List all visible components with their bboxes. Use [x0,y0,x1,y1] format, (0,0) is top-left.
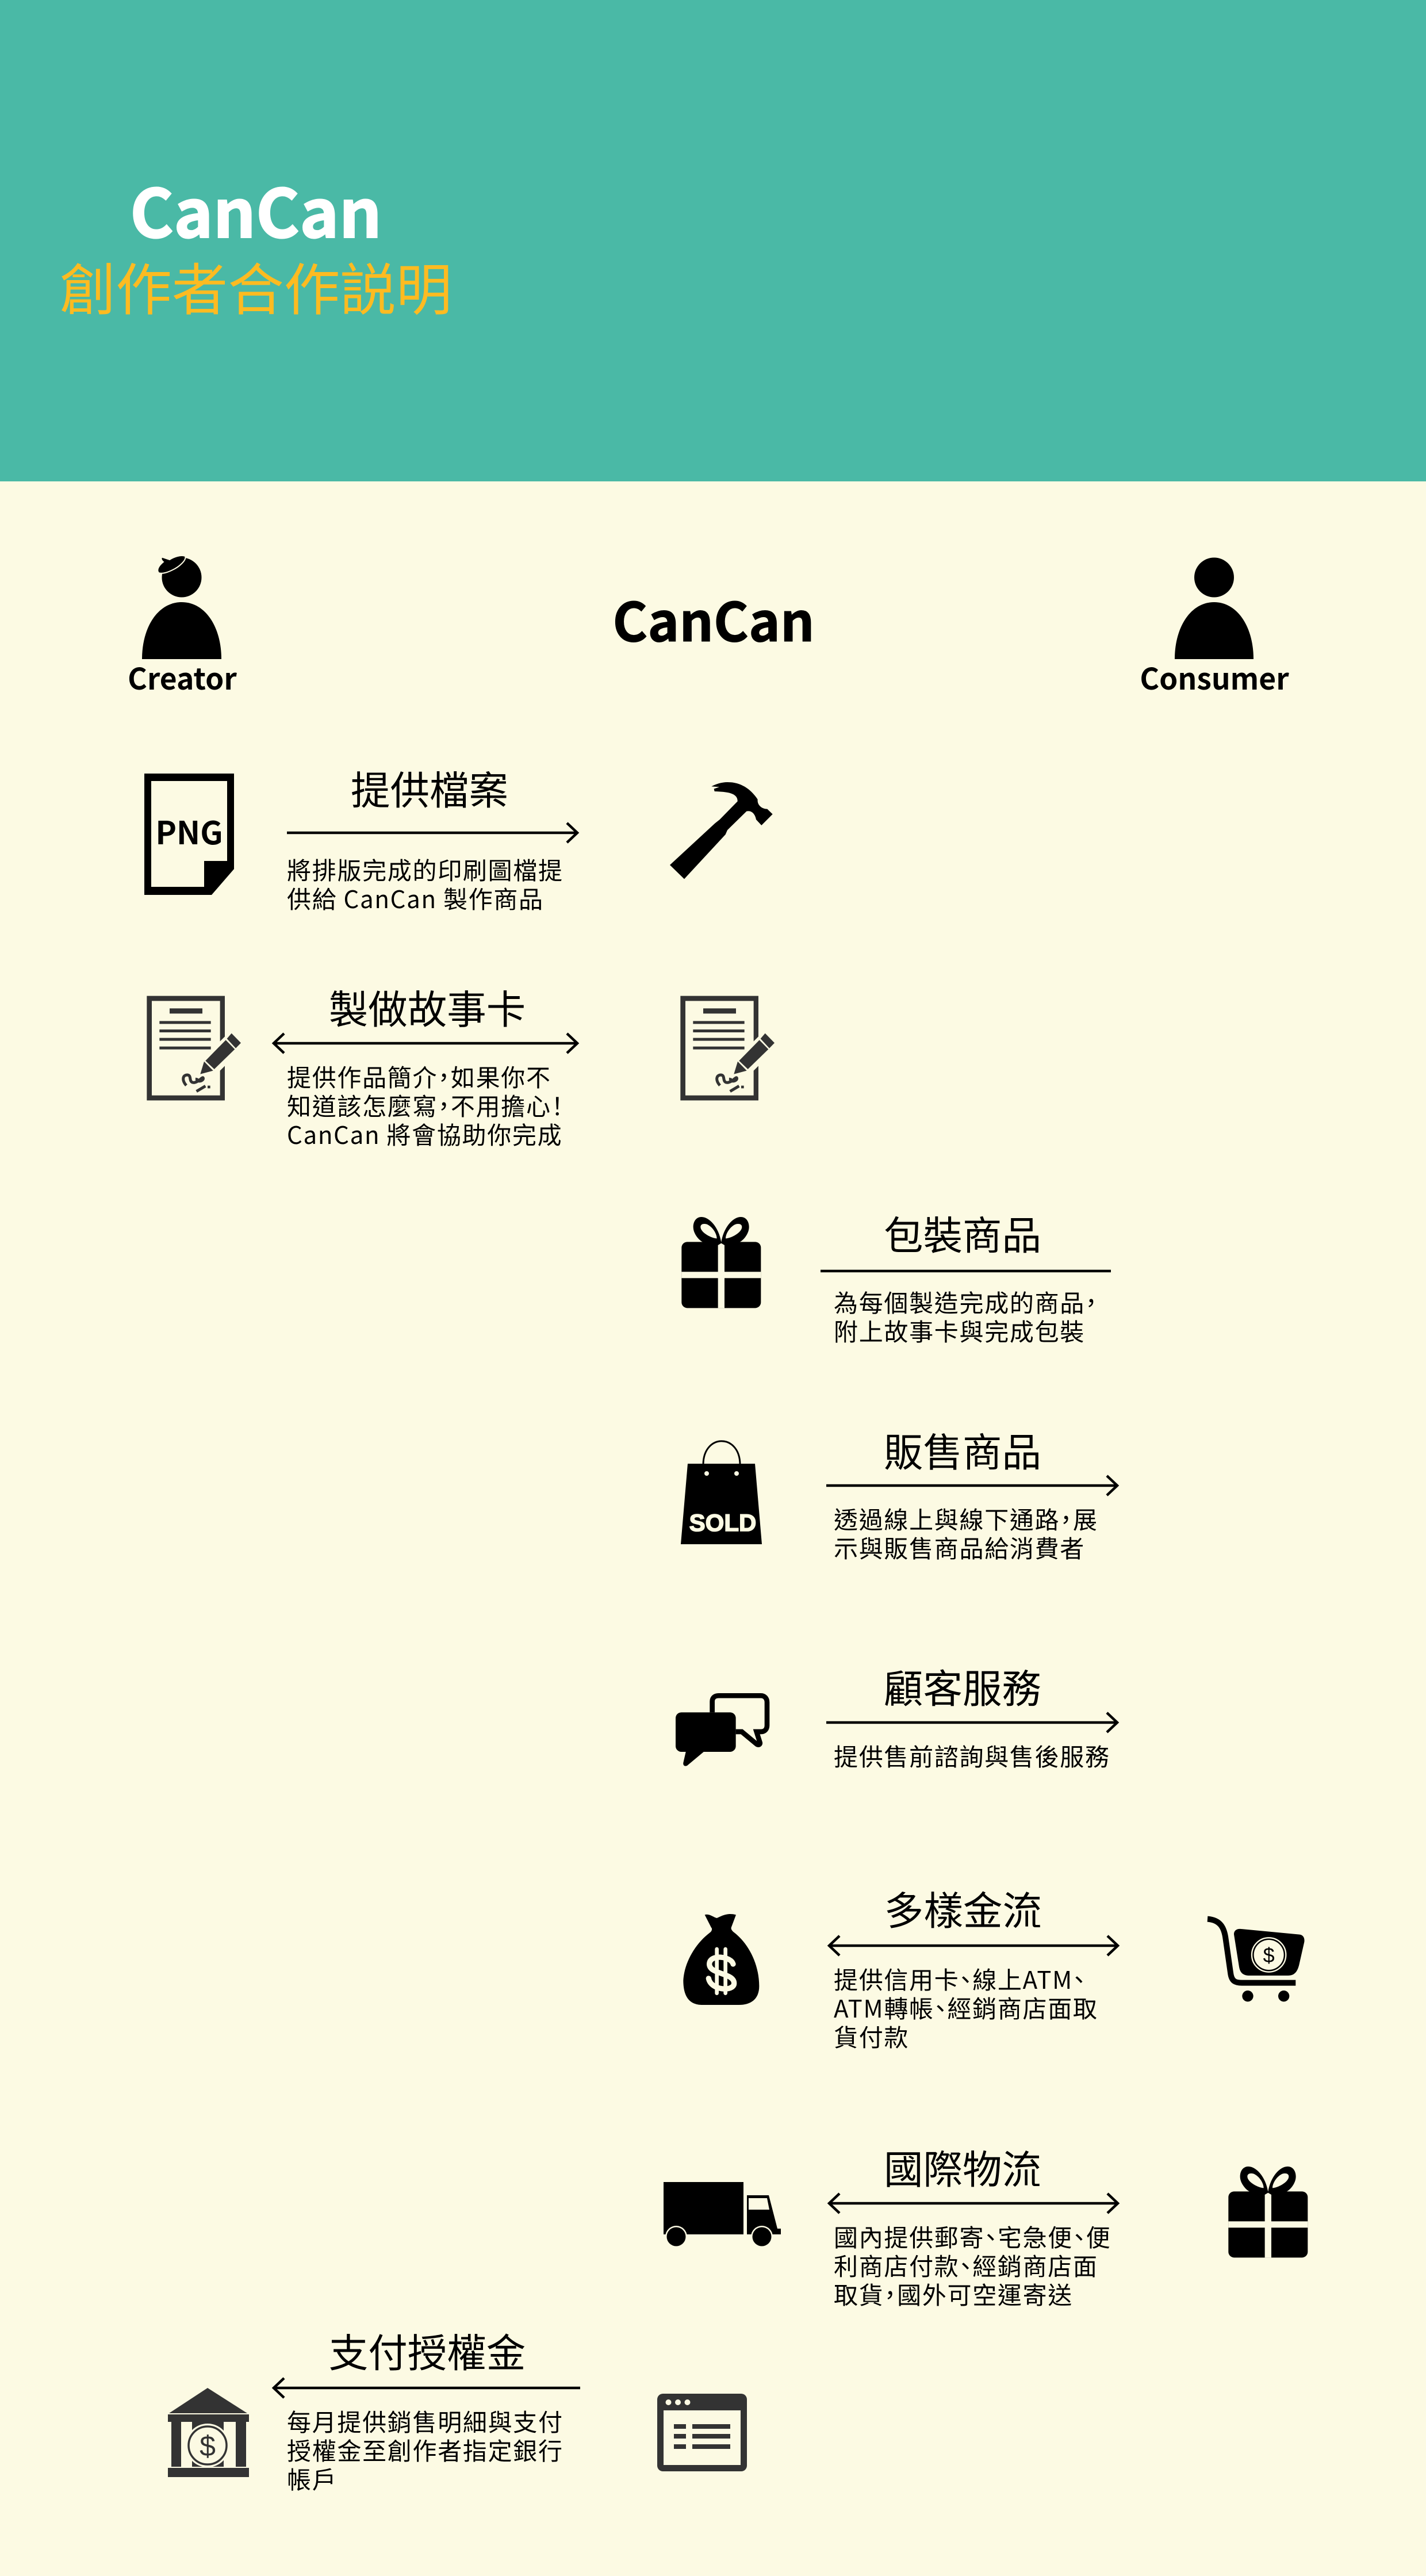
icon: cart: $ [1263,1943,1275,1967]
heading: 販售商品 [884,1421,1041,1478]
description: 授權金至創作者指定銀行 [287,2432,564,2467]
step: pay royalty [274,2322,580,2496]
heading: 國際物流 [884,2138,1041,2195]
description [834,1961,1098,2054]
icon: PNG file: PNG [155,807,223,853]
icon: gift [681,1217,761,1308]
description: 透過線上與線下通路，展 [834,1501,1098,1536]
step: packaging [821,1204,1111,1348]
description [287,852,564,916]
icon: creator [142,556,221,659]
step: logistics [829,2138,1118,2311]
icon: hammer [670,782,773,879]
description: 為每個製造完成的商品， [834,1284,1098,1319]
label: Consumer: Consumer [1140,655,1289,698]
step: selling [826,1421,1117,1565]
description: 提供信用卡、線上ATM、 [834,1961,1086,1996]
description: 國內提供郵寄、宅急便、便 [834,2219,1111,2254]
description [287,2403,564,2496]
step: make story card [274,978,577,1151]
header band [0,0,1426,481]
icon: story card left [147,996,241,1100]
description: 帳戶 [287,2461,337,2496]
arrow right [287,823,577,843]
heading: 製做故事卡 [329,978,526,1035]
step: provide files [287,759,577,916]
icon: sold bag: SOLD [689,1509,756,1536]
icon: cart [1208,1919,1305,2001]
arrow both ways [829,2194,1118,2213]
description: CanCan 將會協助你完成 [287,1116,562,1151]
arrow right [826,1476,1117,1495]
icon: browser report [657,2394,747,2471]
heading: 多樣金流 [884,1880,1042,1936]
description [834,1284,1098,1348]
description: 每月提供銷售明細與支付 [287,2403,564,2439]
icon: story card right [680,996,775,1100]
step: customer service [826,1658,1117,1773]
description: 示與販售商品給消費者 [834,1530,1085,1565]
icon: gift delivered [1228,2167,1308,2257]
description: 提供作品簡介，如果你不 [287,1059,551,1094]
icon: PNG file [144,774,234,895]
description: 貨付款 [834,2019,909,2054]
description [834,1501,1098,1565]
label: Creator: Creator [128,655,237,698]
heading: 提供檔案 [351,759,508,816]
heading: CanCan column: CanCan [612,579,815,657]
step: payment [829,1880,1118,2054]
arrow both ways [829,1936,1118,1955]
description [287,1059,564,1151]
subtitle: 創作者合作説明 [60,246,452,327]
icon: bank [168,2388,249,2477]
description: 利商店付款、經銷商店面 [834,2248,1098,2283]
title: CanCan: CanCan [130,160,382,257]
description: 附上故事卡與完成包裝 [834,1313,1085,1348]
icon: chat bubbles [676,1695,767,1766]
icon: consumer [1175,558,1254,659]
rule [821,1270,1111,1272]
description: 供給 CanCan 製作商品 [287,881,544,916]
heading: 顧客服務 [884,1658,1041,1714]
arrow both ways [274,1034,577,1053]
heading: 包裝商品 [884,1204,1041,1261]
description: 知道該怎麼寫，不用擔心！ [287,1088,564,1123]
description: 提供售前諮詢與售後服務 [834,1738,1110,1773]
icon: money bag [683,1914,759,2005]
description [834,2219,1111,2311]
arrow left [274,2378,580,2398]
description: 將排版完成的印刷圖檔提 [287,852,564,887]
icon: bank: $ [200,2430,216,2462]
arrow right [826,1713,1117,1732]
icon: sold bag [681,1441,762,1544]
icon: truck [664,2182,781,2248]
description: 取貨，國外可空運寄送 [834,2276,1073,2311]
description: ATM轉帳、經銷商店面取 [834,1990,1098,2025]
heading: 支付授權金 [329,2322,526,2379]
